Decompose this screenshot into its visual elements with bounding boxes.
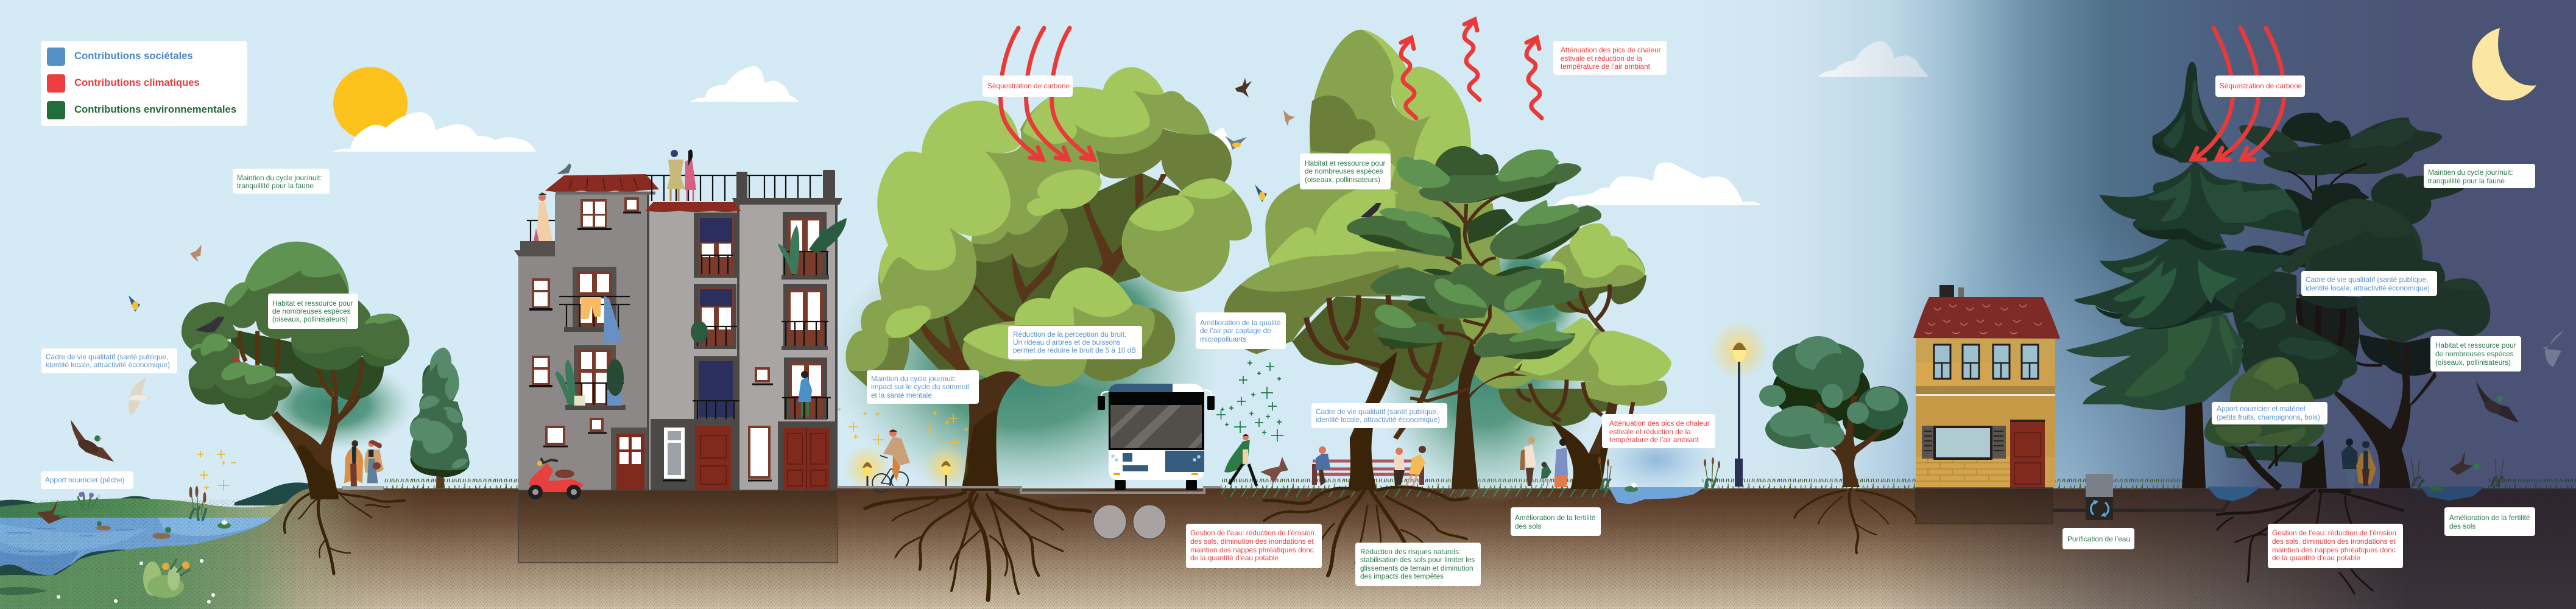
red heat wavy arrow 2	[1464, 19, 1480, 100]
callout: Amélioration air: Amélioration de la qualité	[1200, 319, 1281, 327]
legend item: sociétales: Contributions sociétales	[74, 50, 193, 62]
bird: sparrow	[190, 245, 202, 262]
sparkles left meadow	[197, 450, 236, 491]
callout: Maintien faune: tranquillité pour la faune	[237, 181, 314, 190]
callout: Maintien night: Maintien du cycle jour/nuit:	[2428, 168, 2513, 177]
street lamp	[1710, 321, 1768, 487]
plants: iris and cattails	[78, 486, 206, 521]
legend item: climatiques	[47, 74, 200, 93]
legend item: environnementales	[47, 101, 236, 119]
brick base	[1916, 457, 2010, 488]
legend item: climatiques: Contributions climatiques	[74, 77, 200, 88]
callout: Réduction des risques: des impacts des tempêtes	[1360, 572, 1444, 580]
sun	[333, 67, 408, 140]
red heat wavy arrow 1	[1401, 38, 1416, 118]
chimneys	[1939, 285, 1954, 298]
callout: Habitat tree 3	[1300, 153, 1391, 189]
middle ground floor	[651, 419, 737, 490]
tree 3 trunk in front of bench	[1348, 352, 1397, 490]
callout: Gestion de l'eau night: de la quantité d’eau potable	[2272, 554, 2360, 562]
roots tree 2	[865, 490, 1090, 600]
terrace railing	[646, 175, 822, 201]
bird: flying duck	[71, 420, 114, 462]
lake	[0, 518, 274, 579]
callout: Maintien sommeil: et la santé mentale	[871, 391, 932, 400]
awning	[646, 202, 741, 212]
scooter	[528, 458, 584, 499]
callout: Atténuation top: température de l’air ambiant	[1561, 62, 1651, 71]
callout: Gestion de l'eau night: des sols, diminution des inondations et	[2272, 537, 2396, 546]
callout: Cadre de vie night: identité locale, attractivité économique)	[2306, 284, 2430, 292]
callout: Purification	[2063, 528, 2134, 549]
tree 2: big lime tree	[845, 67, 1252, 600]
callout: Amélioration air: de l’air par captage de	[1200, 326, 1271, 335]
callout: Habitat night: de nombreuses espèces	[2435, 350, 2514, 358]
callout: Maintien night	[2424, 164, 2535, 188]
facade left block	[518, 194, 649, 490]
seated women	[1394, 446, 1426, 486]
roadway	[838, 487, 1221, 493]
balcony windows left block	[573, 267, 616, 330]
pine trunk and branches	[1410, 195, 1527, 489]
pine foliage layers	[1347, 146, 1601, 359]
callout: Réduction du bruit: Réduction de la perception du bruit.	[1013, 330, 1126, 339]
tree 5: teal tree	[1759, 336, 1916, 553]
small cypress tree	[410, 348, 470, 488]
tree 1: dark oak left	[182, 242, 409, 574]
pond	[1609, 482, 1704, 504]
callout: Gestion de l'eau day	[1186, 524, 1322, 568]
bird: low duck	[37, 499, 67, 524]
water purification tank	[2053, 474, 2229, 520]
seated man	[1316, 446, 1330, 486]
cattails by pond	[1598, 457, 1720, 492]
ground soil	[0, 488, 2576, 609]
callout: Séquestration day: Séquestration de carbone	[987, 82, 1070, 90]
cyclist	[872, 429, 910, 492]
bird: small red	[231, 356, 241, 362]
callout: Habitat night	[2430, 336, 2521, 371]
left balcony	[514, 250, 555, 256]
bus	[1098, 384, 1215, 490]
callout: Atténuation pond: Atténuation des pics de chaleur	[1609, 419, 1710, 428]
family walking	[1520, 437, 1568, 487]
pigeon on roof	[557, 163, 571, 174]
night couple	[2318, 438, 2376, 493]
building	[514, 170, 847, 563]
meadow shadow	[0, 587, 48, 595]
roof	[545, 174, 659, 192]
far hills left	[0, 482, 312, 524]
bird: blue tit	[129, 295, 140, 312]
legend	[41, 41, 247, 126]
callout: Cadre de vie night	[2301, 271, 2437, 296]
callout: Maintien faune	[233, 169, 330, 194]
callout: Apport matériel: (petits fruits, champignons, bois)	[2217, 413, 2320, 421]
ducks swimming	[96, 521, 171, 539]
callout: Maintien night: tranquillité pour la faune	[2428, 177, 2505, 185]
roots tree 3	[1264, 487, 1468, 576]
callout: Réduction des risques: stabilisation des sols pour limiter les	[1360, 555, 1475, 564]
callout: fertilité day: des sols	[1515, 522, 1541, 530]
callout: Cadre de vie left: Cadre de vie qualitatif (santé publique,	[46, 353, 168, 361]
house foundation	[1916, 488, 2053, 524]
callout: Gestion de l'eau day: Gestion de l’eau: réduction de l’érosion	[1190, 529, 1314, 537]
door	[2010, 421, 2045, 488]
callout: Habitat tree 1	[268, 294, 358, 329]
callout: fertilité day	[1511, 507, 1601, 536]
red carbon arrows day	[1000, 28, 1094, 160]
plants left block	[556, 359, 576, 405]
night roots	[2217, 490, 2403, 594]
trunk tree 3 base	[1348, 438, 1377, 490]
night ponds	[2207, 457, 2504, 501]
teal cooling glows	[250, 213, 1718, 505]
dusk light near horizon	[1852, 207, 2266, 489]
callout: Apport nourricier pêche	[41, 471, 133, 489]
callout: Maintien sommeil	[867, 370, 979, 404]
tree 3: tall olive tree	[1224, 30, 1527, 576]
callout: Apport nourricier pêche: Apport nourricier (pêche)	[45, 476, 125, 484]
laundry	[580, 297, 601, 319]
red heat wavy arrow 3	[1526, 38, 1542, 118]
green meadow over soil	[0, 488, 426, 609]
callout: Cadre de vie left: identité locale, attractivité économique)	[46, 361, 170, 369]
dark shore hills	[0, 549, 139, 580]
bench and sitters	[1312, 446, 1426, 486]
house wall	[1916, 338, 2055, 488]
callout: Réduction des risques: Réduction des risques naturels:	[1360, 547, 1461, 556]
callout: Habitat night: (oiseaux, pollinisateurs)	[2435, 358, 2511, 367]
callout: Habitat tree 1: de nombreuses espèces	[272, 307, 351, 315]
callout: Cadre de vie park: identité locale, attractivité économique)	[1316, 415, 1440, 424]
moon	[2472, 28, 2536, 100]
callout: Atténuation top: estivale et réduction de la	[1561, 54, 1642, 63]
callout: Amélioration air	[1196, 312, 1286, 349]
night broadleaf tree	[2232, 113, 2490, 488]
callout: Habitat tree 1: Habitat et ressource pour	[272, 299, 353, 308]
callout: fertilité night: des sols	[2449, 522, 2475, 530]
legend item: environnementales: Contributions environnementales	[74, 104, 236, 115]
people walking with dog	[1224, 434, 1257, 486]
callout: Cadre de vie park	[1311, 403, 1447, 428]
lily pad and bush	[143, 519, 231, 598]
right windows	[783, 212, 827, 278]
callout: fertilité day: Amélioration de la fertilité	[1515, 513, 1596, 522]
top windows	[580, 199, 607, 229]
big window and shutters	[1922, 426, 1934, 459]
tree 4: lime trees right of park	[1478, 224, 1671, 489]
callout: Habitat tree 1: (oiseaux, pollinisateurs)	[272, 315, 348, 323]
callout: Amélioration air: micropolluants	[1200, 335, 1246, 343]
bird: gull	[127, 377, 151, 416]
callout: Cadre de vie night: Cadre de vie qualitatif (santé publique,	[2306, 275, 2428, 284]
night conifer	[2066, 62, 2305, 488]
roots tree 1	[284, 490, 404, 574]
lamps and cyclist	[844, 429, 969, 492]
middle windows	[694, 213, 738, 278]
gold sparkles around cyclist	[838, 407, 968, 448]
underground foundation	[518, 490, 838, 563]
green air particle sparkles	[1216, 361, 1283, 442]
birds in park	[1225, 78, 1382, 217]
facade middle and right blocks	[649, 202, 838, 490]
night birds	[2449, 330, 2564, 475]
legend item: sociétales	[47, 48, 193, 66]
callout: fertilité night: Amélioration de la fertilité	[2449, 513, 2530, 522]
callout: Cadre de vie left	[41, 348, 177, 373]
callout: Gestion de l'eau day: de la quantité d’eau potable	[1190, 554, 1279, 562]
callout: Maintien sommeil: impact sur le cycle du sommeil	[871, 382, 969, 391]
callout: Atténuation pond	[1602, 414, 1715, 448]
callout: Purification: Purification de l’eau	[2067, 535, 2130, 543]
callout: Habitat tree 3: Habitat et ressource pour	[1305, 159, 1386, 167]
callout: Gestion de l'eau night	[2268, 524, 2403, 568]
callout: Séquestration day	[983, 76, 1073, 97]
callout: Atténuation top	[1553, 41, 1667, 75]
night soil shade	[1876, 488, 2576, 609]
callout: Cadre de vie park: Cadre de vie qualitatif (santé publique,	[1316, 407, 1438, 416]
callout: Réduction des risques: glissements de terrain et diminution	[1360, 564, 1473, 572]
trunk tree 2	[961, 371, 1021, 491]
callout: Atténuation top: Atténuation des pics de chaleur	[1561, 46, 1661, 54]
callout: Atténuation pond: température de l’air ambiant	[1609, 435, 1699, 444]
red carbon arrows night	[2192, 28, 2284, 160]
roof	[1913, 297, 2060, 339]
water flowers	[57, 559, 215, 604]
callout: Habitat tree 3: (oiseaux, pollinisateurs)	[1305, 175, 1380, 184]
callout: Réduction du bruit: Un rideau d’arbres et de buissons	[1013, 338, 1121, 347]
house windows	[1934, 345, 2038, 379]
callout: Séquestration night	[2215, 76, 2305, 97]
callout: Maintien faune: Maintien du cycle jour/nuit:	[237, 174, 322, 182]
left door	[611, 428, 648, 490]
callout: Habitat tree 3: de nombreuses espèces	[1305, 167, 1383, 175]
house	[1913, 285, 2060, 524]
callout: Gestion de l'eau day: des sols, diminution des inondations et	[1190, 537, 1314, 546]
callout: Gestion de l'eau night: maintien des nappes phréatiques donc	[2272, 546, 2396, 554]
soil stipple	[0, 499, 2576, 609]
night small tree in front	[2204, 357, 2324, 488]
callout: Maintien sommeil: Maintien du cycle jour/nuit:	[871, 375, 956, 383]
callout: fertilité night	[2444, 507, 2535, 536]
pipes underground	[1093, 505, 1166, 539]
callout: Apport matériel	[2212, 402, 2327, 424]
people couple under tree 1	[342, 440, 384, 490]
roof people	[534, 150, 696, 241]
dog	[1260, 457, 1288, 484]
callout: Réduction du bruit	[1008, 326, 1142, 359]
bird: crow	[195, 317, 225, 333]
callout: Habitat night: Habitat et ressource pour	[2435, 341, 2516, 350]
callout: Réduction des risques	[1355, 543, 1481, 586]
callout: Séquestration night: Séquestration de carbone	[2220, 82, 2303, 90]
person on right balcony	[798, 371, 812, 417]
callout: Atténuation pond: estivale et réduction de la	[1609, 428, 1691, 436]
clouds	[332, 41, 1929, 205]
callout: Apport matériel: Apport nourricier et matériel	[2217, 404, 2306, 413]
roots tree 5	[1794, 489, 1916, 553]
callout: Réduction du bruit: permet de réduire le bruit de 5 à 10 dB	[1013, 346, 1136, 354]
grass strips	[384, 479, 2576, 490]
root hatch band	[1221, 488, 1610, 498]
callout: Gestion de l'eau night: Gestion de l’eau: réduction de l’érosion	[2272, 529, 2396, 537]
callout: Gestion de l'eau day: maintien des nappes phréatiques donc	[1190, 546, 1314, 554]
